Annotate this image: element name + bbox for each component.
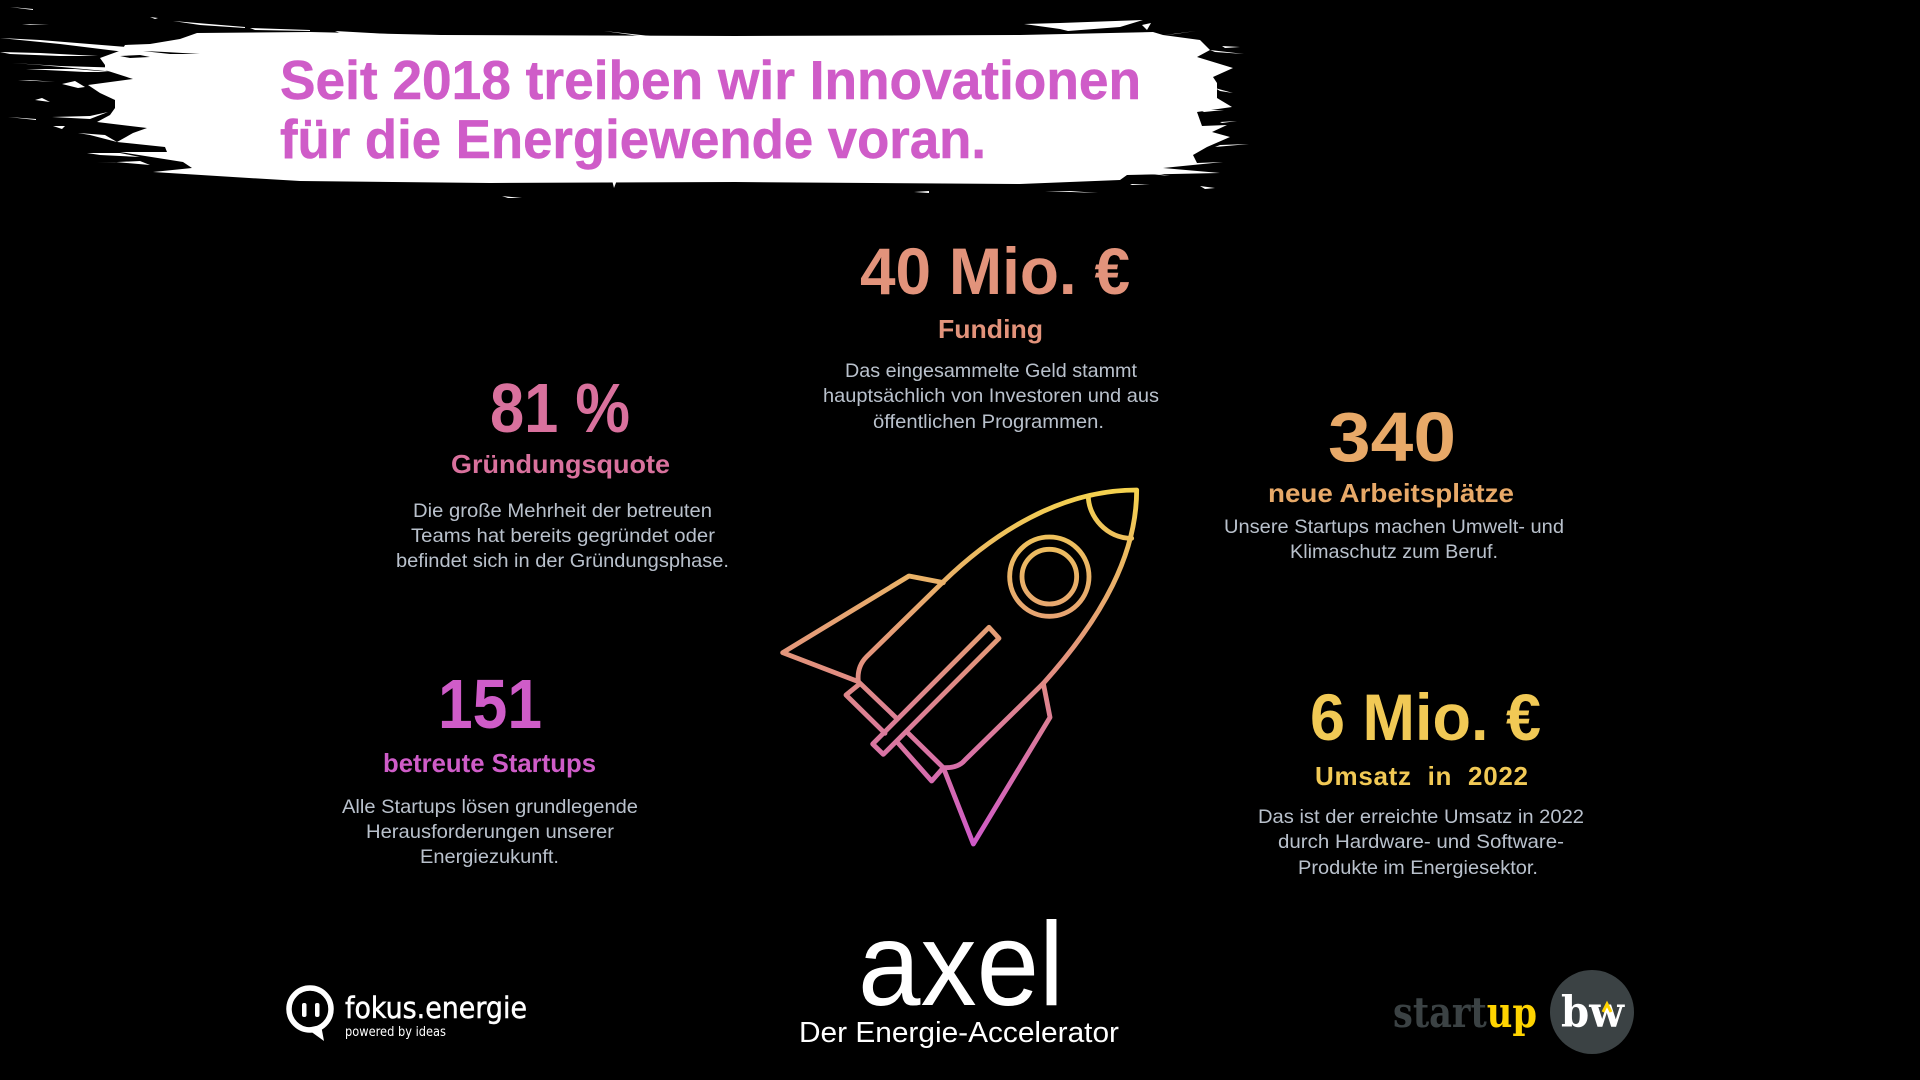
- stat: 6 Mio. € Umsatz in 2022: 6 Mio. €: [1310, 680, 1541, 754]
- title: Seit 2018 treiben wir Innovationen: [280, 49, 1141, 111]
- title: [280, 49, 1141, 170]
- stat: 40 Mio. € Funding: Funding: [938, 314, 1043, 344]
- logo: axel: axel: [858, 898, 1064, 1031]
- stat: 6 Mio. € Umsatz in 2022: Umsatz in 2022: [1315, 761, 1528, 791]
- stat: 340 neue Arbeitsplätze: 340: [1328, 398, 1456, 476]
- stat: 81 % Gründungsquote: Gründungsquote: [451, 449, 670, 479]
- stat: 81 % Gründungsquote: Die große Mehrheit der betreuten: [413, 500, 712, 522]
- stat: 81 % Gründungsquote: Teams hat bereits gegründet oder: [411, 525, 716, 547]
- stat: 340 neue Arbeitsplätze: Unsere Startups machen Umwelt- und: [1224, 516, 1564, 538]
- stat: 6 Mio. € Umsatz in 2022: [1258, 680, 1584, 879]
- stat: 151 betreute Startups: Energiezukunft.: [420, 846, 559, 868]
- logo: fokus.energie: [289, 988, 527, 1041]
- logo: fokus.energie: powered by ideas: [345, 1025, 446, 1040]
- stat: 40 Mio. € Funding: [823, 234, 1159, 433]
- stat: 340 neue Arbeitsplätze: neue Arbeitsplätze: [1268, 478, 1514, 508]
- stat: 40 Mio. € Funding: hauptsächlich von Investoren und aus: [823, 385, 1159, 407]
- stat: 81 % Gründungsquote: 81 %: [490, 369, 630, 447]
- stat: 81 % Gründungsquote: [396, 369, 729, 572]
- stat: 40 Mio. € Funding: öffentlichen Programmen.: [873, 411, 1104, 433]
- stat: 151 betreute Startups: betreute Startups: [383, 748, 596, 778]
- stat: 151 betreute Startups: 151: [438, 665, 542, 743]
- stat: 340 neue Arbeitsplätze: [1224, 398, 1564, 563]
- stat: 81 % Gründungsquote: befindet sich in der Gründungsphase.: [396, 550, 729, 572]
- stat: 151 betreute Startups: Alle Startups lösen grundlegende: [342, 796, 638, 818]
- stat: 40 Mio. € Funding: 40 Mio. €: [860, 234, 1130, 308]
- logo: startup bw: bw: [1561, 988, 1625, 1038]
- brush stroke title background: [0, 7, 1249, 198]
- logo: startup bw: startup: [1393, 988, 1537, 1037]
- stat: 6 Mio. € Umsatz in 2022: Das ist der erreichte Umsatz in 2022: [1258, 806, 1584, 828]
- stat: 151 betreute Startups: [342, 665, 638, 868]
- stat: 6 Mio. € Umsatz in 2022: Produkte im Energiesektor.: [1298, 857, 1538, 879]
- title: für die Energiewende voran.: [280, 108, 986, 170]
- stat: 40 Mio. € Funding: Das eingesammelte Geld stammt: [845, 360, 1138, 382]
- logo: axel: Der Energie-Accelerator: [799, 1017, 1119, 1049]
- brush stroke black scratches: [120, 51, 200, 58]
- logo: axel: [799, 898, 1119, 1049]
- stat: 151 betreute Startups: Herausforderungen unserer: [366, 821, 615, 843]
- logo: fokus.energie: fokus.energie: [345, 991, 527, 1025]
- icon: rocket: [783, 490, 1137, 844]
- stat: 6 Mio. € Umsatz in 2022: durch Hardware- und Software-: [1278, 831, 1564, 853]
- stat: 340 neue Arbeitsplätze: Klimaschutz zum Beruf.: [1290, 541, 1498, 563]
- logo: startup bw: [1393, 970, 1634, 1054]
